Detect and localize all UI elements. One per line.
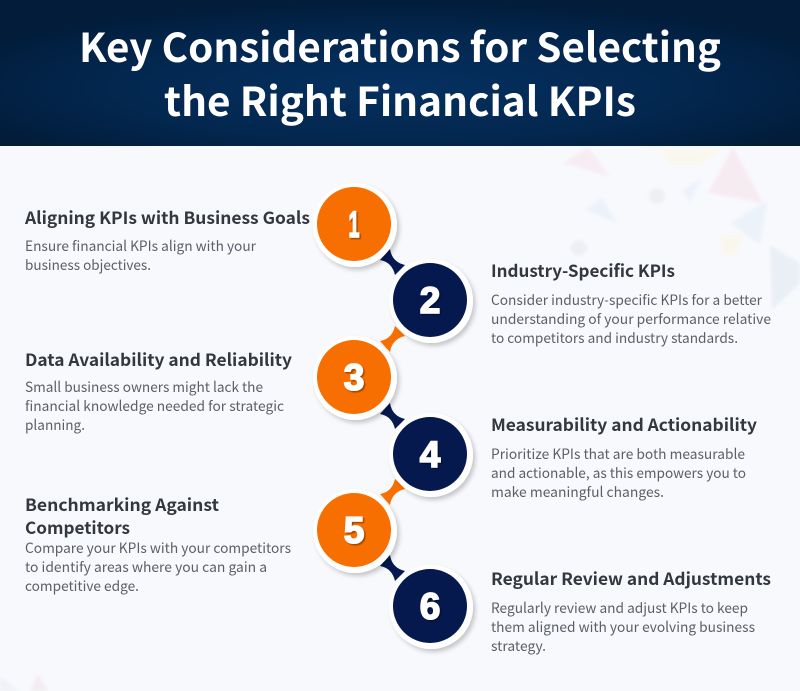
text block: Industry-Specific KPIs: Industry-Specific KPIs [491,257,675,282]
text block: Benchmarking Against Competitors: competitive edge. [25,576,139,596]
text block: Benchmarking Against Competitors: to identify areas where you can gain a [25,557,267,577]
decorative faint triangles [0,147,800,691]
text block: Benchmarking Against Competitors: Competitors [25,514,130,539]
step 4 circle: 4 [420,434,441,475]
text block: Measurability and Actionability: and actionable, as this empowers you to [491,463,746,483]
step 6 circle [389,565,473,649]
text block: Aligning KPIs with Business Goals [24,204,310,275]
step 2 circle: 2 [420,280,440,321]
page background [0,146,800,691]
step 5 circle [313,489,397,573]
text block: Regular Review and Adjustments: Regularly review and adjust KPIs to keep [491,598,748,618]
step 3 circle: 3 [344,357,364,398]
text block: Measurability and Actionability [491,411,757,502]
step 1 circle: 1 [348,204,360,245]
step 2 circle [389,259,473,343]
title [79,16,721,128]
text block: Measurability and Actionability: Prioritize KPIs that are both measurable [491,444,745,464]
text block: Regular Review and Adjustments: strategy. [491,636,546,656]
text block: Benchmarking Against Competitors [25,491,291,596]
text block: Regular Review and Adjustments: them aligned with your evolving business [491,617,755,637]
header banner [0,0,800,146]
text block: Regular Review and Adjustments: Regular Review and Adjustments [491,565,771,590]
text block: Aligning KPIs with Business Goals: Aligning KPIs with Business Goals [24,204,310,229]
text block: Data Availability and Reliability: planning. [25,415,85,435]
text block: Industry-Specific KPIs: understanding of your performance relative [491,309,771,329]
text block: Regular Review and Adjustments [491,565,771,656]
step 6 circle: 6 [420,586,440,627]
text block: Industry-Specific KPIs [491,257,771,348]
title: Key Considerations for Selecting [79,16,721,74]
connector: step 2 to 3 [380,326,405,352]
text block: Data Availability and Reliability: Data Availability and Reliability [25,346,292,371]
text block: Data Availability and Reliability [25,346,292,435]
text block: Benchmarking Against Competitors: Benchmarking Against [25,491,219,516]
text block: Measurability and Actionability: Measurability and Actionability [491,411,757,436]
connector: step 3 to 4 [380,403,405,429]
text block: Measurability and Actionability: make meaningful changes. [491,482,664,502]
text block: Aligning KPIs with Business Goals: business objectives. [25,255,151,275]
step 3 circle [313,336,397,420]
text block: Benchmarking Against Competitors: Compare your KPIs with your competitors [25,538,291,558]
connector: step 1 to 2 [380,249,405,275]
step 1 circle [313,183,397,267]
text block: Data Availability and Reliability: Small business owners might lack the [25,377,263,397]
text block: Industry-Specific KPIs: to competitors and industry standards. [491,328,738,348]
text block: Data Availability and Reliability: financial knowledge needed for strategic [25,396,284,416]
step 5 circle: 5 [344,510,364,551]
connector: step 5 to 6 [380,555,405,581]
text block: Industry-Specific KPIs: Consider industry-specific KPIs for a better [491,290,763,310]
text block: Aligning KPIs with Business Goals: Ensure financial KPIs align with your [25,236,257,256]
title: the Right Financial KPIs [164,70,636,128]
connector: step 4 to 5 [380,479,405,505]
step 4 circle [389,413,473,497]
